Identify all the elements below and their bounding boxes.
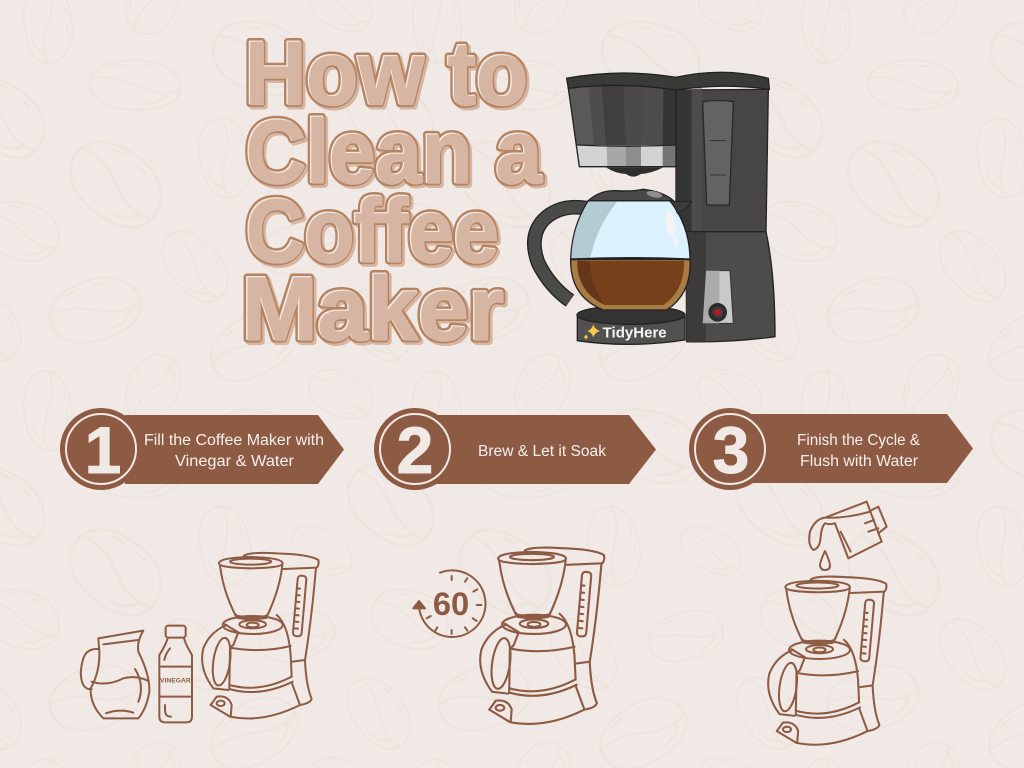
icon: water jug xyxy=(81,631,149,718)
icon: sparkle xyxy=(584,324,600,340)
step 1 banner: Fill the Coffee Maker with xyxy=(144,432,324,449)
step 3 banner xyxy=(689,408,973,490)
step 3 banner: Finish the Cycle & xyxy=(797,432,921,449)
title xyxy=(241,24,544,362)
icon: 60 timer: 60 xyxy=(433,585,469,622)
logo: TidyHere: TidyHere xyxy=(603,325,667,341)
step 1 banner: 1 xyxy=(85,413,121,487)
step 2 banner: Brew & Let it Soak xyxy=(478,443,606,460)
step 1 banner xyxy=(60,408,344,490)
icon: vinegar bottle: VINEGAR xyxy=(160,677,191,684)
icon: coffee maker step 2 xyxy=(480,548,604,724)
icon: coffee maker step 1 xyxy=(202,553,319,718)
illustration: coffee maker with carafe xyxy=(534,72,775,344)
icon: pouring pitcher xyxy=(809,502,887,570)
step 1 banner: Vinegar & Water xyxy=(175,453,294,470)
step 3 banner: Flush with Water xyxy=(800,453,918,470)
icon: coffee maker step 3 xyxy=(768,577,886,745)
icon: vinegar bottle xyxy=(159,626,192,722)
step 3 banner: 3 xyxy=(713,413,749,487)
step 2 banner xyxy=(374,408,656,490)
icon: 60 timer xyxy=(413,570,486,637)
step 2 banner: 2 xyxy=(397,413,433,487)
